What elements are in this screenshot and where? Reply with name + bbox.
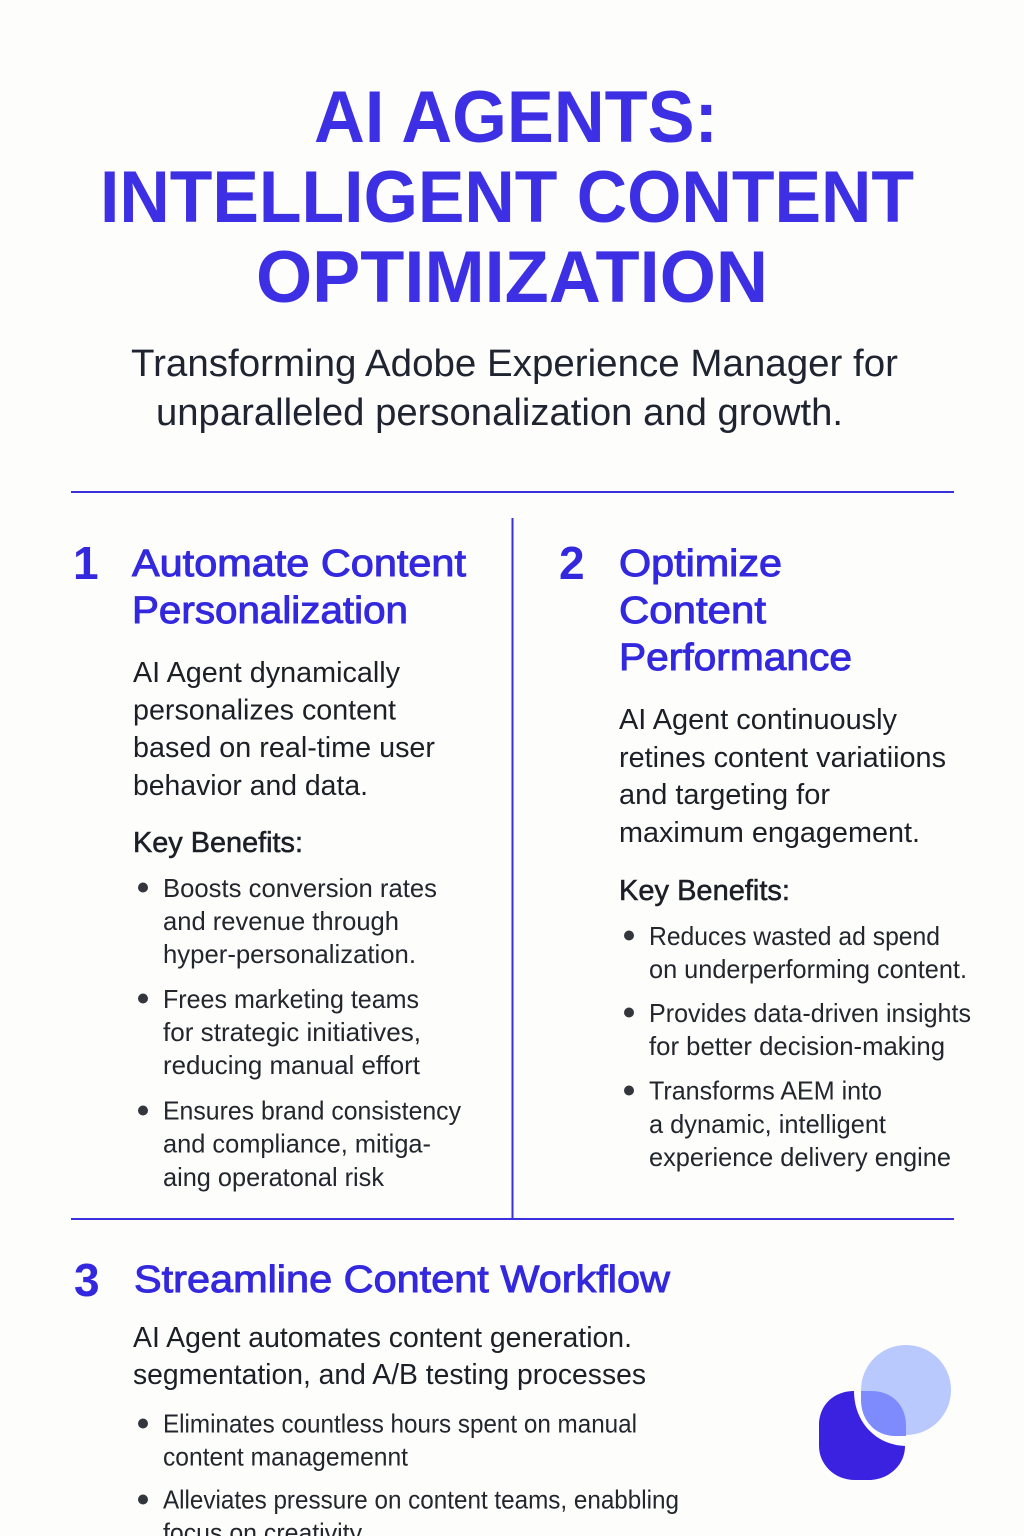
benefits list 1: reducing manual effort xyxy=(163,1050,421,1080)
key benefits heading 2: Key Benefits: xyxy=(619,875,790,907)
benefits list 2: Transforms AEM into xyxy=(649,1076,882,1106)
subtitle: unparalleled personalization and growth. xyxy=(156,392,843,434)
heading: optimize content performance xyxy=(619,543,852,679)
benefits list 1: Ensures brand consistency xyxy=(163,1096,461,1126)
benefits list 2: Provides data-driven insights xyxy=(649,998,971,1028)
benefits list 1: Frees marketing teams xyxy=(163,984,419,1014)
icon: overlapping shapes logo xyxy=(819,1345,951,1480)
title xyxy=(100,77,914,318)
number 2: 2 xyxy=(559,537,585,589)
benefits list 1: hyper-personalization. xyxy=(163,939,416,969)
heading: streamline content workflow: Streamline Content Workflow xyxy=(134,1259,671,1301)
benefits list 2: a dynamic, intelligent xyxy=(649,1109,887,1139)
benefits list 3: Alleviates pressure on content teams, enabbling xyxy=(163,1484,679,1514)
benefits list 3: Eliminates countless hours spent on manual xyxy=(163,1408,637,1438)
benefits list 3: content managemennt xyxy=(163,1442,409,1472)
panel: section 1 xyxy=(73,537,466,1192)
description 2: retines content variatiions xyxy=(619,742,946,774)
description 2: maximum engagement. xyxy=(619,817,920,849)
description 1: AI Agent dynamically xyxy=(133,657,401,689)
heading: optimize content performance: Content xyxy=(619,590,766,632)
benefits list 2: for better decision-making xyxy=(649,1031,945,1061)
description 2: AI Agent continuously xyxy=(619,704,898,736)
heading: automate content personalization xyxy=(132,543,466,632)
description 2 xyxy=(619,704,946,849)
benefits list 2 xyxy=(624,921,971,1172)
benefits list 1: for strategic initiatives, xyxy=(163,1017,421,1047)
benefits list 2: on underperforming content. xyxy=(649,954,967,984)
key benefits heading 1: Key Benefits: xyxy=(133,827,303,859)
benefits list 1 xyxy=(138,873,461,1192)
description 3: AI Agent automates content generation. xyxy=(133,1322,632,1354)
benefits list 2: Reduces wasted ad spend xyxy=(649,921,940,951)
description 1: based on real-time user xyxy=(133,732,436,764)
heading: optimize content performance: Performance xyxy=(619,637,852,679)
description 1 xyxy=(133,657,436,802)
number 1: 1 xyxy=(73,537,99,589)
benefits list 1: and compliance, mitiga- xyxy=(163,1128,431,1158)
panel: section 3 xyxy=(74,1254,679,1536)
title: INTELLIGENT CONTENT xyxy=(100,157,914,238)
benefits list 1: Boosts conversion rates xyxy=(163,873,437,903)
description 3: segmentation, and A/B testing processes xyxy=(133,1359,646,1391)
benefits list 1: aing operatonal risk xyxy=(163,1162,385,1192)
description 2: and targeting for xyxy=(619,779,831,811)
description 1: behavior and data. xyxy=(133,770,368,802)
number 3: 3 xyxy=(74,1254,100,1306)
subtitle xyxy=(131,343,898,434)
title: AI AGENTS: xyxy=(314,77,718,158)
subtitle: Transforming Adobe Experience Manager for xyxy=(131,343,898,385)
heading: optimize content performance: Optimize xyxy=(619,543,782,585)
title: OPTIMIZATION xyxy=(256,237,768,318)
heading: automate content personalization: Automate Content xyxy=(132,543,466,585)
heading: automate content personalization: Personalization xyxy=(132,590,408,632)
description 3 xyxy=(133,1322,646,1391)
benefits list 1: and revenue through xyxy=(163,906,399,936)
description 1: personalizes content xyxy=(133,694,396,726)
benefits list 2: experience delivery engine xyxy=(649,1142,951,1172)
benefits list 3 xyxy=(138,1408,679,1536)
panel: section 2 xyxy=(559,537,971,1172)
